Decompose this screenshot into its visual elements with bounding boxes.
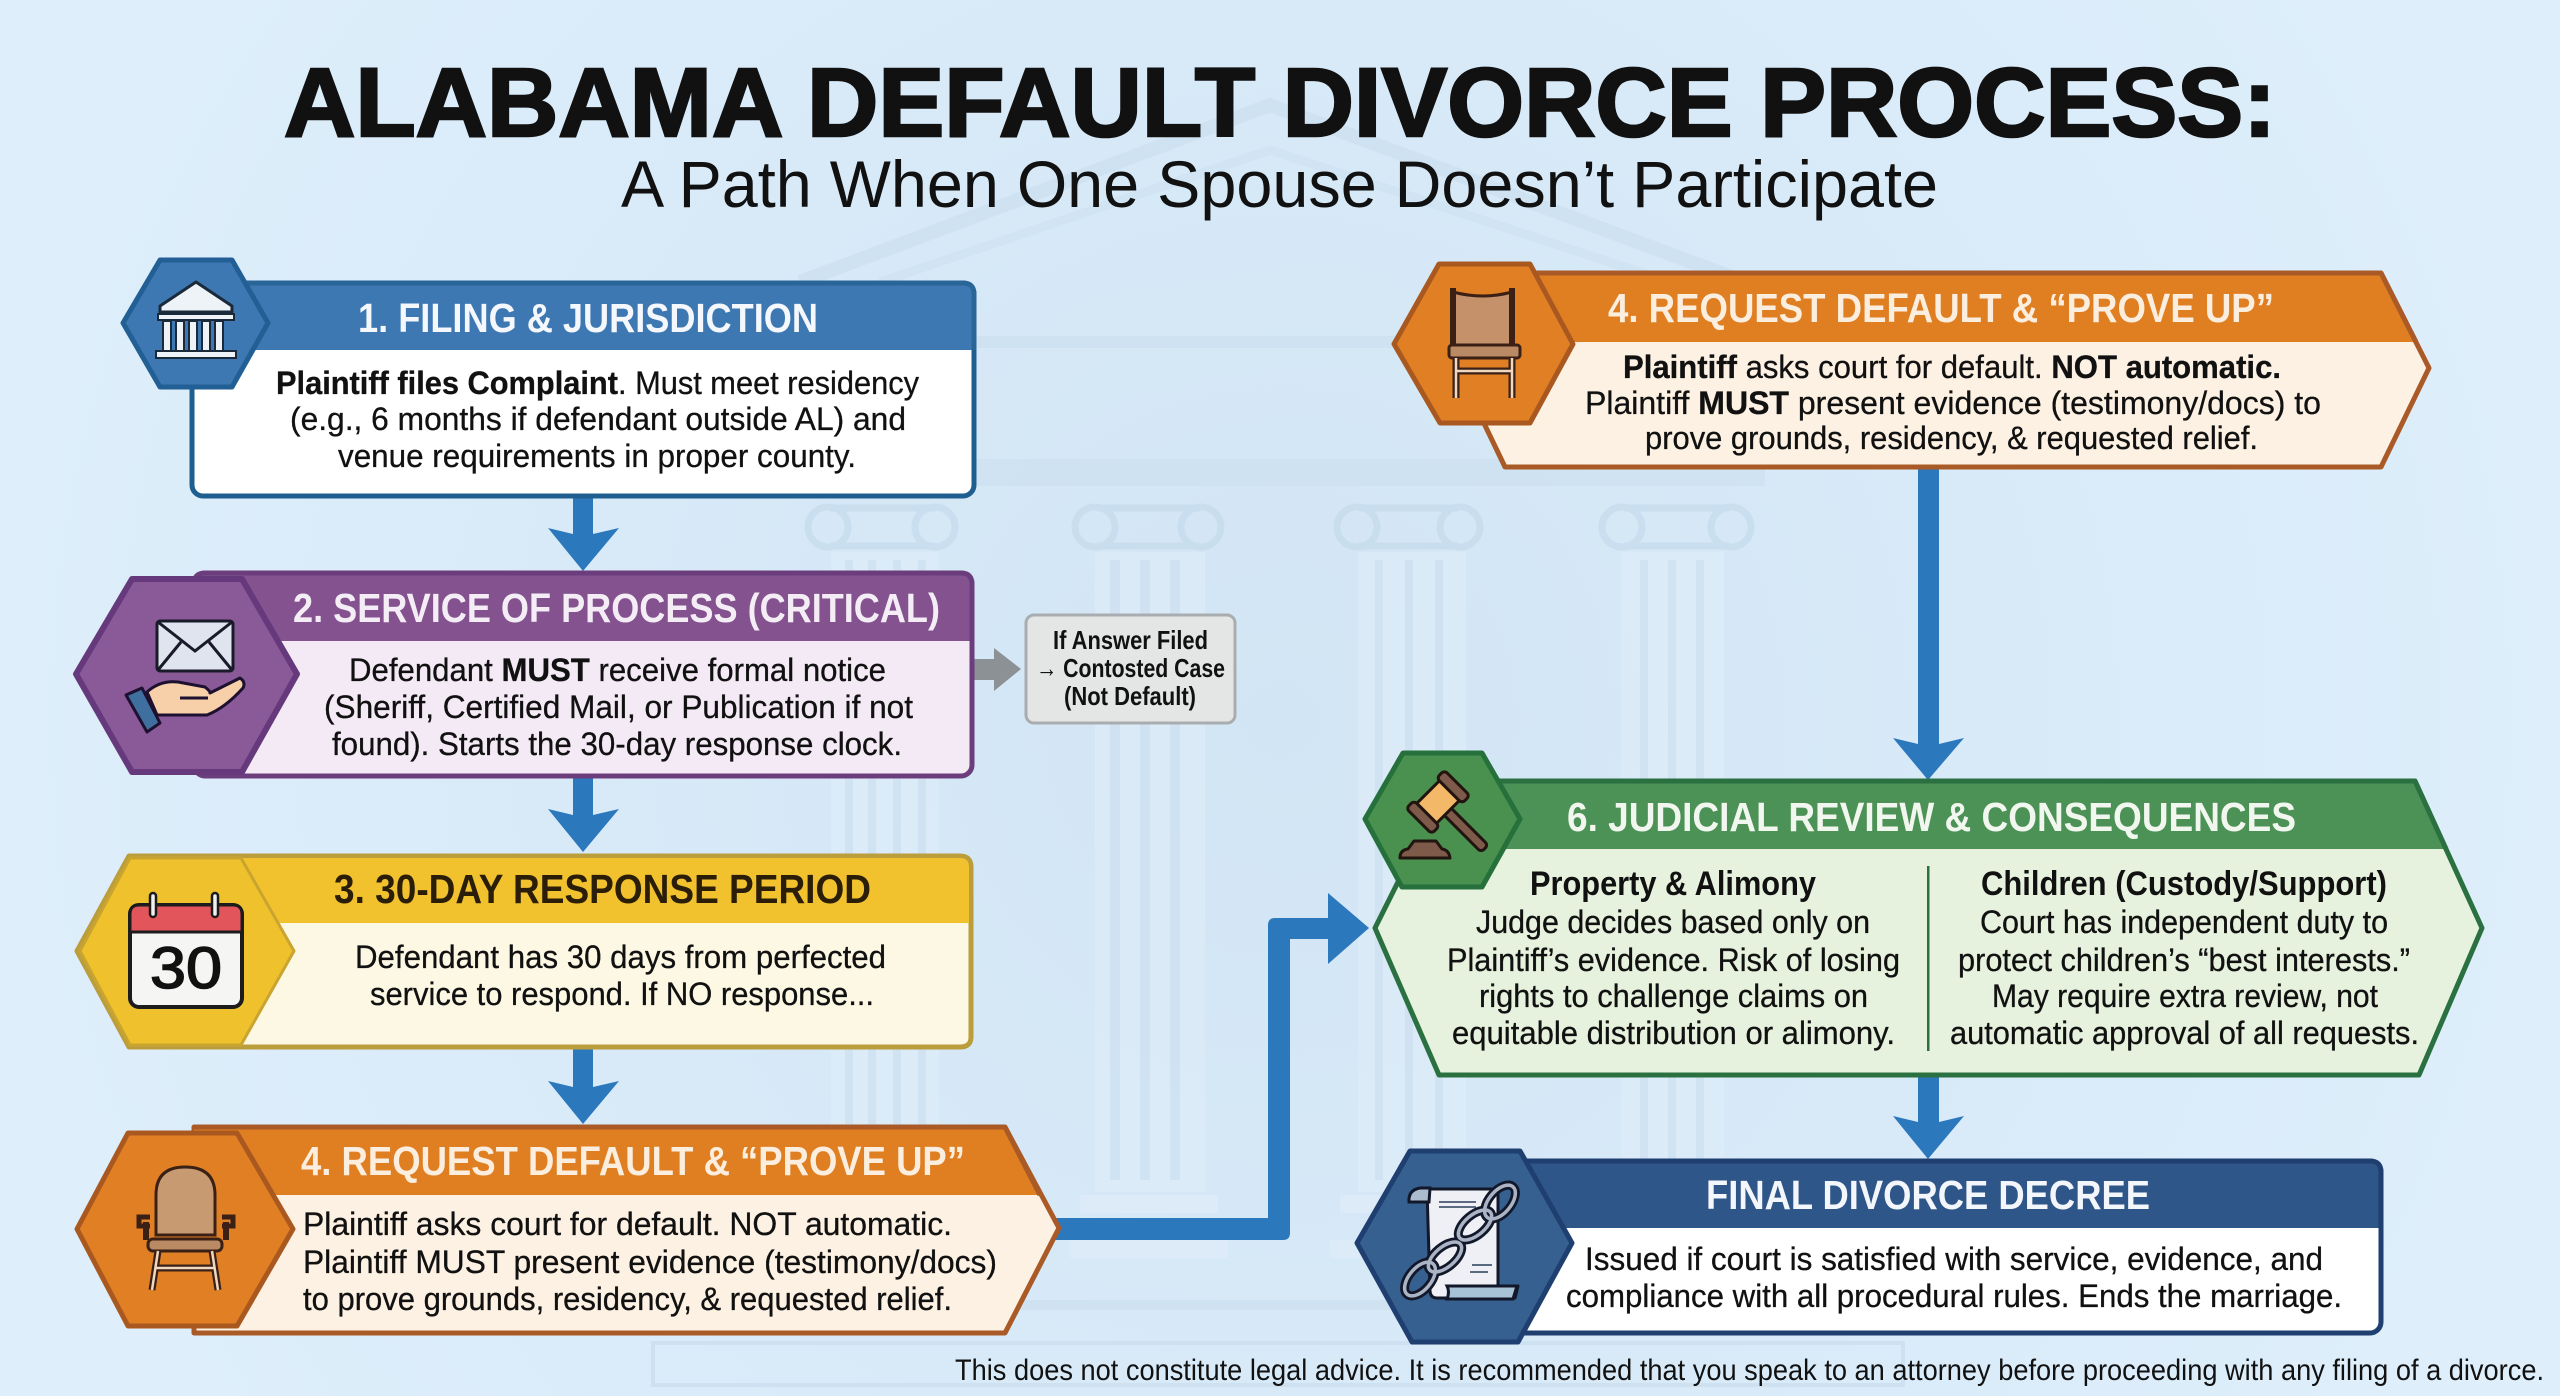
body text: Plaintiff MUST present evidence (testimony/docs) to: [1585, 385, 2321, 421]
body text: (Sheriff, Certified Mail, or Publication if not: [324, 689, 913, 725]
heading: 1. FILING & JURISDICTION: [358, 295, 818, 341]
column: children: Court has independent duty to: [1980, 904, 2388, 940]
body text: to prove grounds, residency, & requested relief.: [303, 1281, 952, 1317]
body text: compliance with all procedural rules. Ends the marriage.: [1566, 1278, 2342, 1314]
heading: 6. JUDICIAL REVIEW & CONSEQUENCES: [1567, 794, 2296, 840]
column: children: Children (Custody/Support): [1981, 865, 2387, 903]
icon: gavel: [1365, 753, 1520, 887]
column: property and alimony: equitable distribution or alimony.: [1452, 1015, 1895, 1051]
panel: 6 judicial review and consequences: [1365, 753, 2482, 1075]
body text: venue requirements in proper county.: [338, 438, 856, 474]
body text: Issued if court is satisfied with service, evidence, and: [1585, 1241, 2323, 1277]
heading: 4. REQUEST DEFAULT & “PROVE UP”: [1608, 285, 2274, 331]
column: children: automatic approval of all requests.: [1950, 1015, 2419, 1051]
arrow: step 2 to 3: [548, 777, 619, 852]
body text: [1566, 1241, 2342, 1314]
arrow: step 6 to final decree: [1893, 1075, 1964, 1159]
callout: contested case: (Not Default): [1064, 681, 1196, 711]
column: children: protect children’s “best interests.”: [1958, 942, 2410, 978]
callout: contested case: → Contosted Case: [1036, 653, 1225, 683]
body text: Defendant has 30 days from perfected: [355, 939, 886, 975]
column: property and alimony: Judge decides based only on: [1476, 904, 1870, 940]
heading: 3. 30-DAY RESPONSE PERIOD: [334, 866, 871, 912]
body text: Plaintiff MUST present evidence (testimony/docs): [303, 1244, 997, 1280]
body text: Plaintiff asks court for default. NOT automatic.: [1623, 349, 2281, 385]
body text: Plaintiff files Complaint. Must meet residency: [276, 365, 919, 401]
panel: final divorce decree: [1357, 1151, 2381, 1342]
column: property and alimony: Property & Alimony: [1530, 865, 1816, 903]
panel: 4 request default (left): [77, 1127, 1059, 1333]
subtitle: A Path When One Spouse Doesn’t Participate: [621, 147, 1938, 221]
arrow: step 1 to 2: [548, 496, 619, 571]
column: property and alimony: rights to challenge claims on: [1479, 978, 1868, 1014]
panel: 3 30-day response period: [77, 856, 971, 1047]
arrow: left step 4 to step 6: [1050, 893, 1369, 1240]
background temple watermark: [653, 105, 1903, 1385]
panel: 2 service of process: [76, 573, 972, 776]
title: ALABAMA DEFAULT DIVORCE PROCESS:: [284, 48, 2276, 157]
divider: [1927, 866, 1930, 1051]
heading: 2. SERVICE OF PROCESS (CRITICAL): [293, 585, 940, 631]
icon: calendar 30: [80, 858, 294, 1045]
arrow: right step 4 to step 6: [1893, 467, 1964, 780]
icon: calendar 30: 30: [150, 936, 222, 1001]
heading: 4. REQUEST DEFAULT & “PROVE UP”: [301, 1138, 965, 1184]
icon: envelope and hand: [76, 579, 297, 772]
body text: [1585, 349, 2321, 456]
body text: [324, 652, 913, 762]
heading: FINAL DIVORCE DECREE: [1706, 1172, 2150, 1218]
panel: 4 request default (right): [1394, 264, 2429, 467]
body text: prove grounds, residency, & requested relief.: [1645, 420, 2258, 456]
arrow: step 2 to contested case: [972, 648, 1021, 691]
icon: scroll with broken chain: [1357, 1151, 1572, 1342]
icon: chair: [1394, 264, 1573, 423]
body text: [355, 939, 886, 1012]
body text: Plaintiff asks court for default. NOT automatic.: [303, 1206, 952, 1242]
icon: chair: [77, 1133, 293, 1326]
body text: found). Starts the 30-day response clock.: [332, 726, 902, 762]
column: children: May require extra review, not: [1992, 978, 2378, 1014]
column: children: [1950, 865, 2419, 1051]
body text: [303, 1206, 997, 1317]
callout: contested case: If Answer Filed: [1053, 625, 1208, 655]
body text: service to respond. If NO response...: [370, 976, 874, 1012]
icon: courthouse: [123, 260, 268, 387]
arrow: step 3 to 4: [548, 1048, 619, 1124]
panel: 1 filing and jurisdiction: [123, 260, 974, 496]
body text: Defendant MUST receive formal notice: [349, 652, 886, 688]
column: property and alimony: [1447, 865, 1900, 1051]
callout: contested case: [1026, 615, 1235, 723]
body text: [276, 365, 919, 474]
column: property and alimony: Plaintiff’s evidence. Risk of losing: [1447, 942, 1900, 978]
body text: (e.g., 6 months if defendant outside AL) and: [290, 401, 906, 437]
